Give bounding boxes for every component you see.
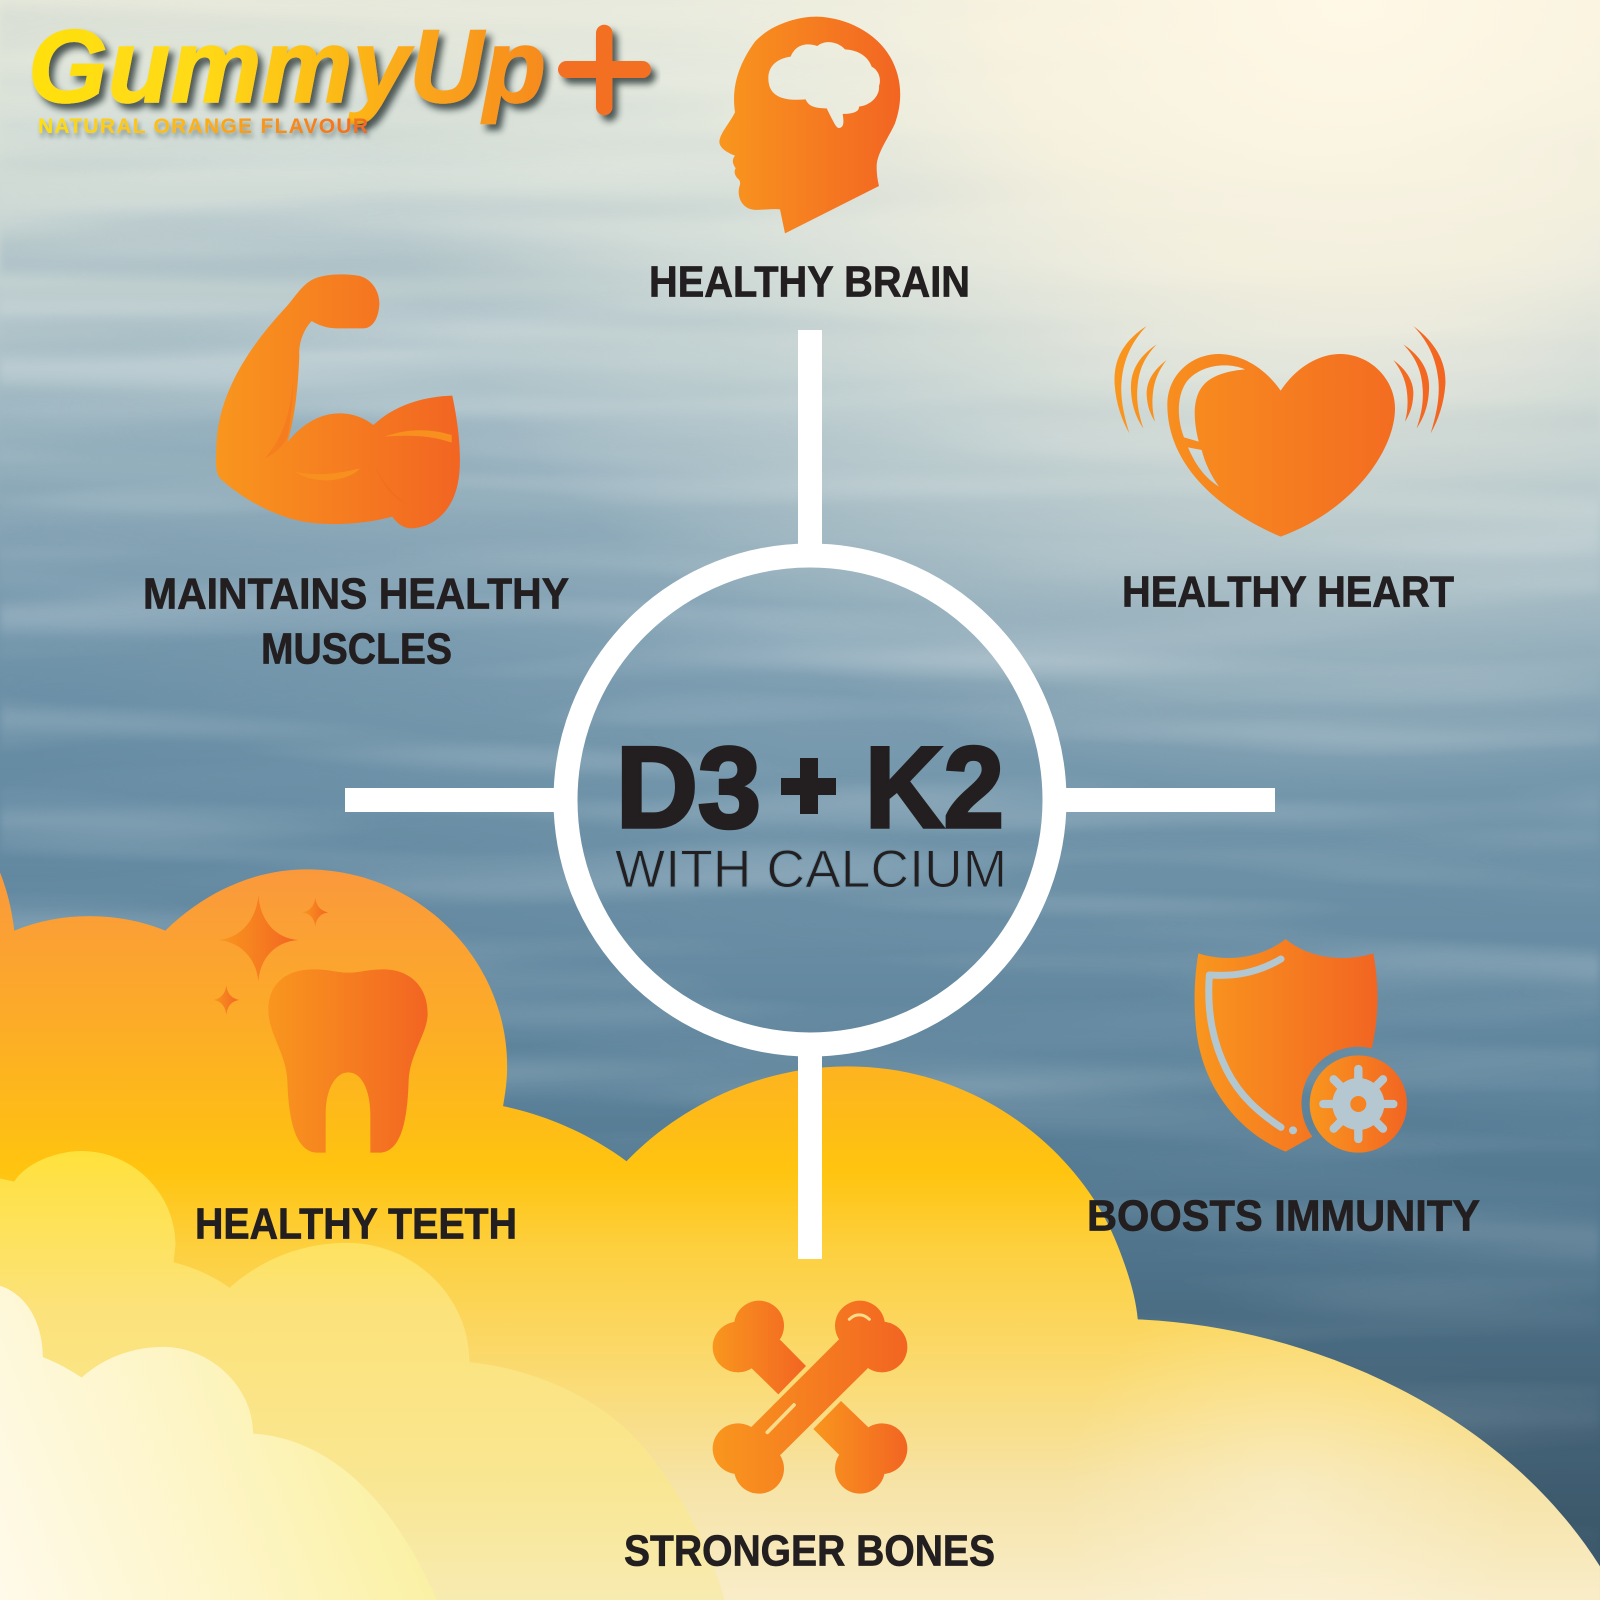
label: maintains healthy muscles: [143, 570, 569, 674]
icon: beating heart: [1115, 326, 1445, 537]
label: maintains healthy muscles: MUSCLES: [261, 624, 452, 674]
label: healthy teeth: HEALTHY TEETH: [195, 1200, 517, 1248]
icon: tooth with sparkles: [213, 895, 428, 1153]
center subtitle: with calcium: WITH CALCIUM: [615, 840, 1007, 899]
center title: D3 + K2: K2: [865, 724, 1004, 852]
icon: head with brain: [719, 17, 900, 233]
icon: shield with virus: [1195, 939, 1407, 1153]
center title: D3 + K2: D3: [616, 724, 761, 852]
label: maintains healthy muscles: MAINTAINS HEALTHY: [143, 570, 569, 618]
label: healthy heart: HEALTHY HEART: [1122, 568, 1454, 616]
icon: crossed bones: [713, 1301, 907, 1494]
label: boosts immunity: BOOSTS IMMUNITY: [1087, 1192, 1480, 1240]
logo plus sign: [558, 25, 651, 115]
label: healthy brain: HEALTHY BRAIN: [649, 258, 970, 306]
logo wordmark: GummyUp: [28, 9, 546, 125]
icon: flexed muscle: [216, 274, 460, 528]
logo: GummyUp+: [28, 9, 651, 138]
clouds: layered yellow smoke: [0, 869, 1600, 1600]
center title: D3 + K2: [616, 724, 1004, 852]
label: stronger bones: STRONGER BONES: [624, 1526, 995, 1576]
logo tagline: NATURAL ORANGE FLAVOUR: [38, 115, 368, 138]
center crosshair: ring and four bars: [345, 330, 1275, 1259]
